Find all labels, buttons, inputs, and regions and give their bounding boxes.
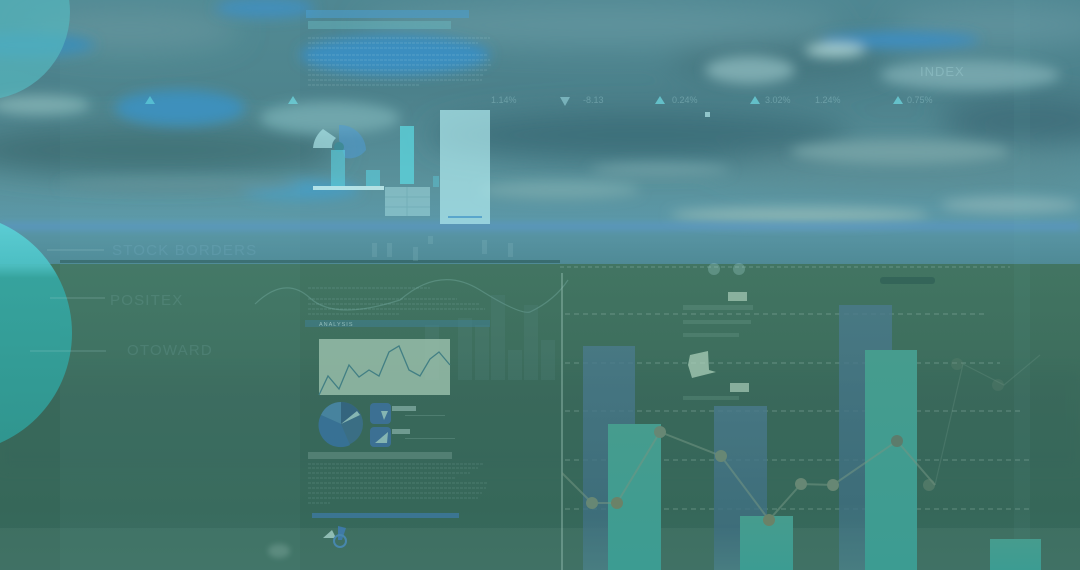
ticker row: -8.13 bbox=[583, 95, 604, 105]
faint small bars near horizon bbox=[372, 236, 513, 261]
ticker row: 3.02% bbox=[765, 95, 791, 105]
light tall panel bbox=[440, 110, 490, 224]
pie chart bbox=[319, 402, 363, 447]
side label rules bbox=[30, 250, 106, 351]
legend text bbox=[392, 406, 455, 439]
ticker row: 0.75% bbox=[907, 95, 933, 105]
report panel: top text block bbox=[306, 10, 491, 85]
heading bar: analysis bbox=[305, 320, 490, 328]
icon: pie wheel bbox=[313, 125, 366, 158]
line chart with markers bbox=[562, 355, 1040, 526]
ticker row: 1.24% bbox=[815, 95, 841, 105]
ticker row bbox=[491, 64, 965, 105]
heading bar: analysis: ANALYSIS bbox=[319, 322, 354, 328]
table panel bbox=[385, 187, 430, 216]
bar chart: blue bars bbox=[583, 305, 892, 570]
wave line bbox=[255, 280, 568, 312]
icon: small pie bottom bbox=[323, 526, 346, 547]
faint side labels: POSITEX bbox=[110, 292, 183, 309]
floating panel: laptop and labels bbox=[683, 263, 753, 400]
icon tiles bbox=[370, 403, 391, 447]
background: field bbox=[0, 260, 1080, 570]
heading bar: lower bbox=[308, 452, 452, 459]
faint background bars bbox=[425, 295, 555, 380]
report panel: middle text bbox=[308, 288, 485, 314]
heading bar: blue bbox=[312, 513, 459, 518]
report panel: lower text bbox=[308, 464, 487, 503]
bar chart: bright bars bbox=[313, 126, 439, 190]
faint side labels: STOCK BORDERS bbox=[112, 242, 257, 259]
bottom smudge bbox=[268, 544, 290, 558]
line chart panel bbox=[319, 339, 450, 395]
ticker row: 1.14% bbox=[491, 95, 517, 105]
ticker row: 0.24% bbox=[672, 95, 698, 105]
circle: top left bbox=[0, 0, 70, 100]
faint side labels bbox=[110, 242, 257, 359]
bar chart: teal bars bbox=[608, 350, 1041, 570]
ticker arrows bbox=[145, 96, 903, 117]
faint side labels: OTOWARD bbox=[127, 342, 213, 359]
circle: left middle bbox=[0, 213, 72, 453]
dashed horizon line bbox=[560, 266, 1010, 268]
background: sky bbox=[0, 0, 1080, 264]
ticker row: INDEX bbox=[920, 64, 965, 79]
chart right: axis and gridlines bbox=[562, 273, 1030, 570]
